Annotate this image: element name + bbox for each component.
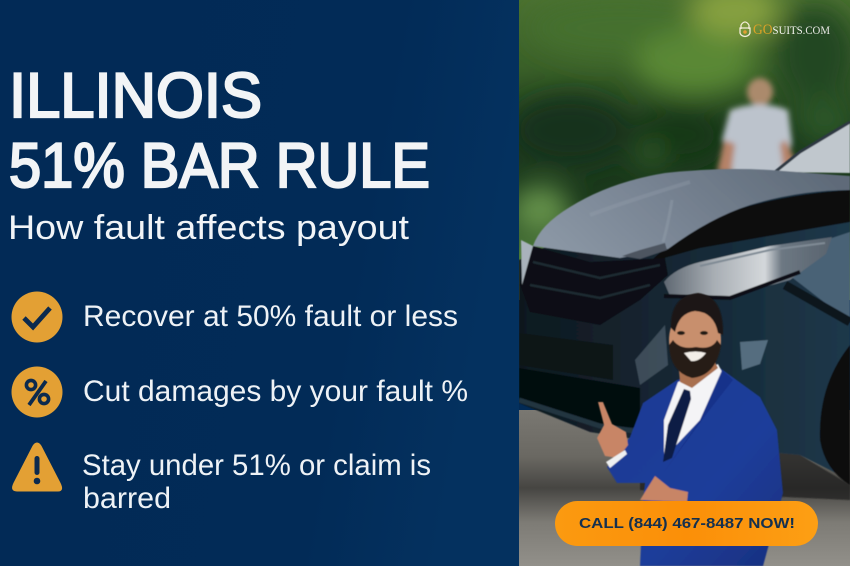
lower hand (640, 476, 688, 502)
beard (669, 340, 721, 378)
pointing hand (597, 402, 628, 458)
subtitle: How fault affects payout (8, 209, 410, 247)
engine gap (650, 190, 850, 262)
crumpled hood (533, 169, 850, 259)
bullet: stay under 51%: Stay under 51% or claim is (82, 449, 431, 482)
lapel (664, 370, 733, 472)
photo: crash scene (510, 0, 850, 566)
bullet: recover at 50%: Recover at 50% fault or less (83, 300, 458, 333)
grille (520, 246, 668, 325)
road shadow under car (640, 440, 850, 500)
wheel (820, 345, 850, 485)
title (9, 61, 430, 201)
face (669, 307, 721, 373)
hair (671, 293, 723, 335)
road (519, 410, 850, 566)
bullet: stay under 51%: barred (83, 482, 171, 515)
shirt (664, 364, 722, 458)
logo: GOSUITS.COM (753, 22, 830, 38)
call to action button: CALL (844) 467-8487 NOW! (579, 516, 795, 532)
bullet: stay under 51% (82, 449, 431, 515)
neck (678, 360, 718, 388)
panel: navy text panel (0, 0, 519, 566)
windshield (775, 122, 850, 173)
lawyer (597, 293, 783, 566)
bullet: cut damages: Cut damages by your fault % (83, 375, 468, 408)
eyes (677, 331, 685, 335)
icon: warning triangle (13, 443, 62, 491)
bumper (519, 333, 613, 380)
blurred foliage background (510, 0, 850, 300)
title: ILLINOIS (9, 61, 262, 131)
tie (663, 389, 691, 462)
headlight (664, 237, 832, 298)
title: 51% BAR RULE (9, 131, 430, 201)
right fender (785, 232, 850, 322)
fender crease (785, 285, 850, 322)
car body (519, 180, 850, 480)
call to action button (555, 501, 818, 546)
icon: check mark badge (12, 292, 62, 342)
blurred bystander (717, 78, 797, 180)
smile (684, 352, 706, 361)
suit (607, 368, 783, 566)
icon: percent badge (12, 366, 62, 418)
